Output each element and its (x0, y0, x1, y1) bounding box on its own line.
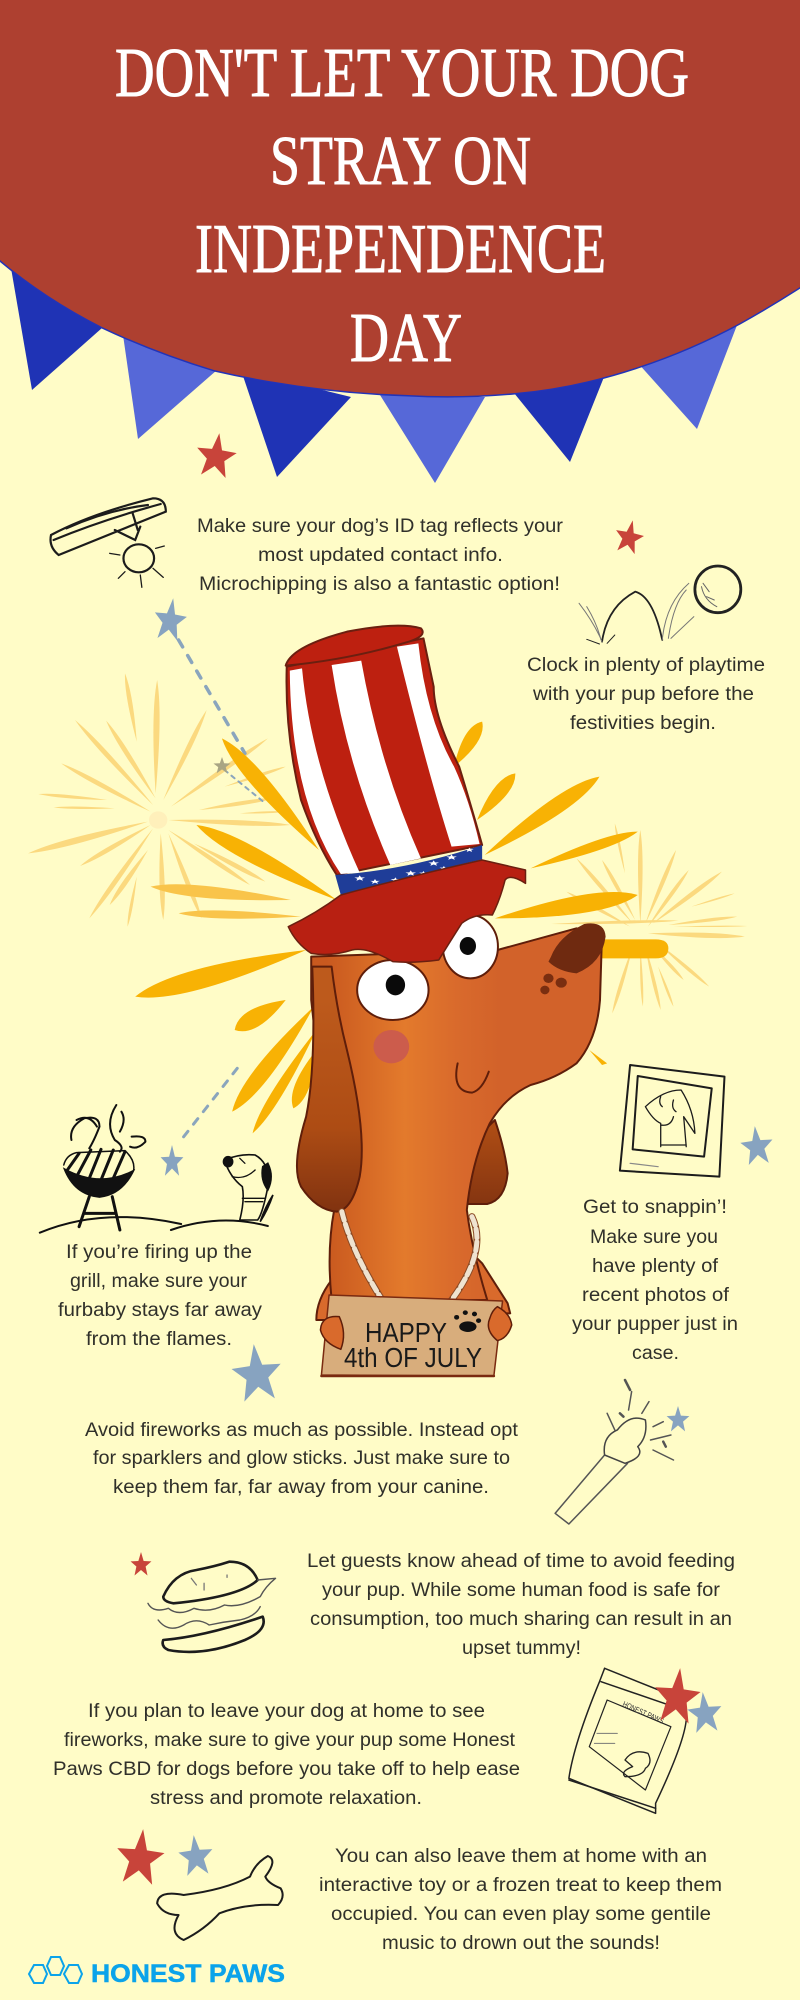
mouth (456, 1063, 489, 1093)
icon: grill (40, 1105, 268, 1233)
title: STRAY ON (270, 123, 531, 200)
left arm (316, 1280, 342, 1320)
tip: cbd: stress and promote relaxation. (150, 1788, 422, 1809)
tip: photos: recent photos of (582, 1285, 730, 1306)
right arm (472, 1253, 510, 1313)
tip: playtime: Clock in plenty of playtime (527, 655, 765, 676)
right pupil (460, 937, 476, 955)
burger top bun (163, 1562, 258, 1603)
grill bowl base (64, 1168, 134, 1197)
tip: id tag: Microchipping is also a fantastic option! (199, 574, 560, 595)
red header banner (0, 0, 800, 396)
sign text: HAPPY (365, 1317, 447, 1348)
dashed trail lower (181, 1068, 237, 1140)
sign board (321, 1295, 503, 1376)
left ear (297, 967, 362, 1212)
blue star collar (151, 596, 189, 642)
tip: cbd: fireworks, make sure to give your pup some Honest (64, 1730, 516, 1751)
tip: food: consumption, too much sharing can result in an (310, 1609, 732, 1630)
title: DAY (350, 300, 462, 377)
sign bottom edge (321, 1375, 494, 1377)
title (115, 35, 689, 377)
blue star photo (739, 1124, 775, 1166)
left pupil (386, 975, 405, 995)
logo: honest paws (29, 1957, 285, 1988)
tip: food (307, 1551, 735, 1659)
tip: cbd (53, 1701, 520, 1809)
blue star bone (177, 1833, 215, 1877)
tip: grill (58, 1242, 263, 1350)
ball shading (702, 583, 717, 607)
bunting flags (11, 268, 739, 483)
tip: food: upset tummy! (462, 1638, 581, 1659)
tip: cbd: Paws CBD for dogs before you take off to help ease (53, 1759, 520, 1780)
hat stripe 3 (397, 643, 480, 847)
stars (114, 430, 775, 1886)
icon: treat bag (569, 1668, 686, 1813)
tip: grill: from the flames. (86, 1329, 232, 1350)
grill bowl outline (64, 1151, 134, 1170)
red star top (194, 430, 239, 479)
bag label text: HONEST PAWS (621, 1700, 665, 1726)
ball (695, 566, 741, 613)
tip: fireworks: keep them far, far away from your canine. (113, 1477, 489, 1498)
blue star sparkler (667, 1406, 689, 1431)
icon: collar (51, 498, 166, 587)
hat body (287, 638, 482, 875)
icon: small dog (223, 1155, 273, 1222)
nose (548, 923, 606, 973)
dashed trail upper (179, 640, 265, 803)
dog illustration (286, 626, 606, 1376)
rope left (342, 1212, 385, 1305)
hat top (286, 626, 423, 666)
icon: ball and bounce (579, 566, 741, 644)
tip: photos: your pupper just in (572, 1314, 738, 1335)
fireworks left (28, 673, 291, 927)
band stars (354, 848, 474, 884)
grill bars (67, 1149, 125, 1180)
red star burger (131, 1552, 151, 1576)
left eye (357, 960, 429, 1020)
tip: id tag: most updated contact info. (258, 545, 503, 566)
head and neck (311, 928, 602, 1300)
freckles (540, 974, 567, 994)
icon: photo (620, 1065, 724, 1177)
cheek (373, 1030, 409, 1063)
right ear (466, 1120, 508, 1204)
tip: id tag: Make sure your dog’s ID tag reflects your (197, 516, 564, 537)
burger lettuce (148, 1578, 276, 1628)
tip: id tag (197, 516, 564, 595)
tip: playtime (527, 655, 765, 734)
tip: photos: case. (632, 1343, 679, 1364)
hat stripe 2 (332, 661, 421, 865)
icon: sparkler (555, 1380, 673, 1524)
tip: photos: have plenty of (592, 1256, 719, 1277)
hat stripe 1 (290, 668, 360, 874)
tip: fireworks (85, 1420, 519, 1498)
sign text (344, 1317, 482, 1373)
tip: fireworks: for sparklers and glow sticks. Just make sure to (93, 1448, 510, 1469)
logo hexagons (29, 1957, 82, 1983)
tip: cbd: If you plan to leave your dog at home to see (88, 1701, 485, 1722)
tip: fireworks: Avoid fireworks as much as possible. Instead opt (85, 1420, 519, 1441)
tip: grill: If you’re firing up the (66, 1242, 252, 1263)
hat brim (288, 860, 526, 962)
grill legs (79, 1197, 120, 1230)
bounce arcs (602, 592, 662, 642)
title: INDEPENDENCE (195, 211, 606, 288)
tip: playtime: festivities begin. (570, 713, 716, 734)
banner edge (0, 260, 800, 396)
rope right (444, 1217, 477, 1310)
burger seeds (191, 1575, 227, 1590)
right hand (488, 1307, 512, 1341)
burger bottom bun (163, 1617, 264, 1652)
fireworks right (551, 823, 747, 1013)
logo wordmark: HONEST PAWS (91, 1960, 285, 1988)
tip: photos: Get to snappin’! (583, 1197, 727, 1218)
tip: playtime: with your pup before the (532, 684, 754, 705)
burst rays behind dog (135, 722, 668, 1133)
tip: photos (572, 1197, 738, 1364)
sign text: 4th OF JULY (344, 1342, 482, 1373)
hat band (335, 845, 482, 895)
smoke (71, 1105, 145, 1152)
left hand (320, 1316, 344, 1349)
blue star big (229, 1342, 284, 1403)
tip: food: your pup. While some human food is safe for (322, 1580, 721, 1601)
blue star bag (686, 1690, 724, 1734)
hills (40, 1217, 268, 1233)
rope right highlight (444, 1217, 477, 1310)
tip: toy: music to drown out the sounds! (382, 1933, 660, 1954)
tan faded star (213, 757, 231, 773)
right eye (443, 915, 498, 978)
paw print (454, 1310, 481, 1332)
tip: grill: furbaby stays far away (58, 1300, 263, 1321)
tip: photos: Make sure you (590, 1227, 718, 1248)
red star bone (114, 1827, 167, 1886)
tip: grill: grill, make sure your (70, 1271, 248, 1292)
icon: burger (148, 1562, 276, 1652)
red star right (612, 517, 647, 555)
blue star grill (161, 1145, 183, 1176)
tip: toy (319, 1846, 722, 1954)
tip: food: Let guests know ahead of time to avoid feeding (307, 1551, 735, 1572)
tip: toy: occupied. You can even play some gentile (331, 1904, 711, 1925)
icon: bone (157, 1856, 283, 1940)
tip: toy: You can also leave them at home with an (335, 1846, 707, 1867)
tip: toy: interactive toy or a frozen treat to keep them (319, 1875, 722, 1896)
red star bag (652, 1666, 703, 1725)
rope left highlight (342, 1212, 385, 1305)
